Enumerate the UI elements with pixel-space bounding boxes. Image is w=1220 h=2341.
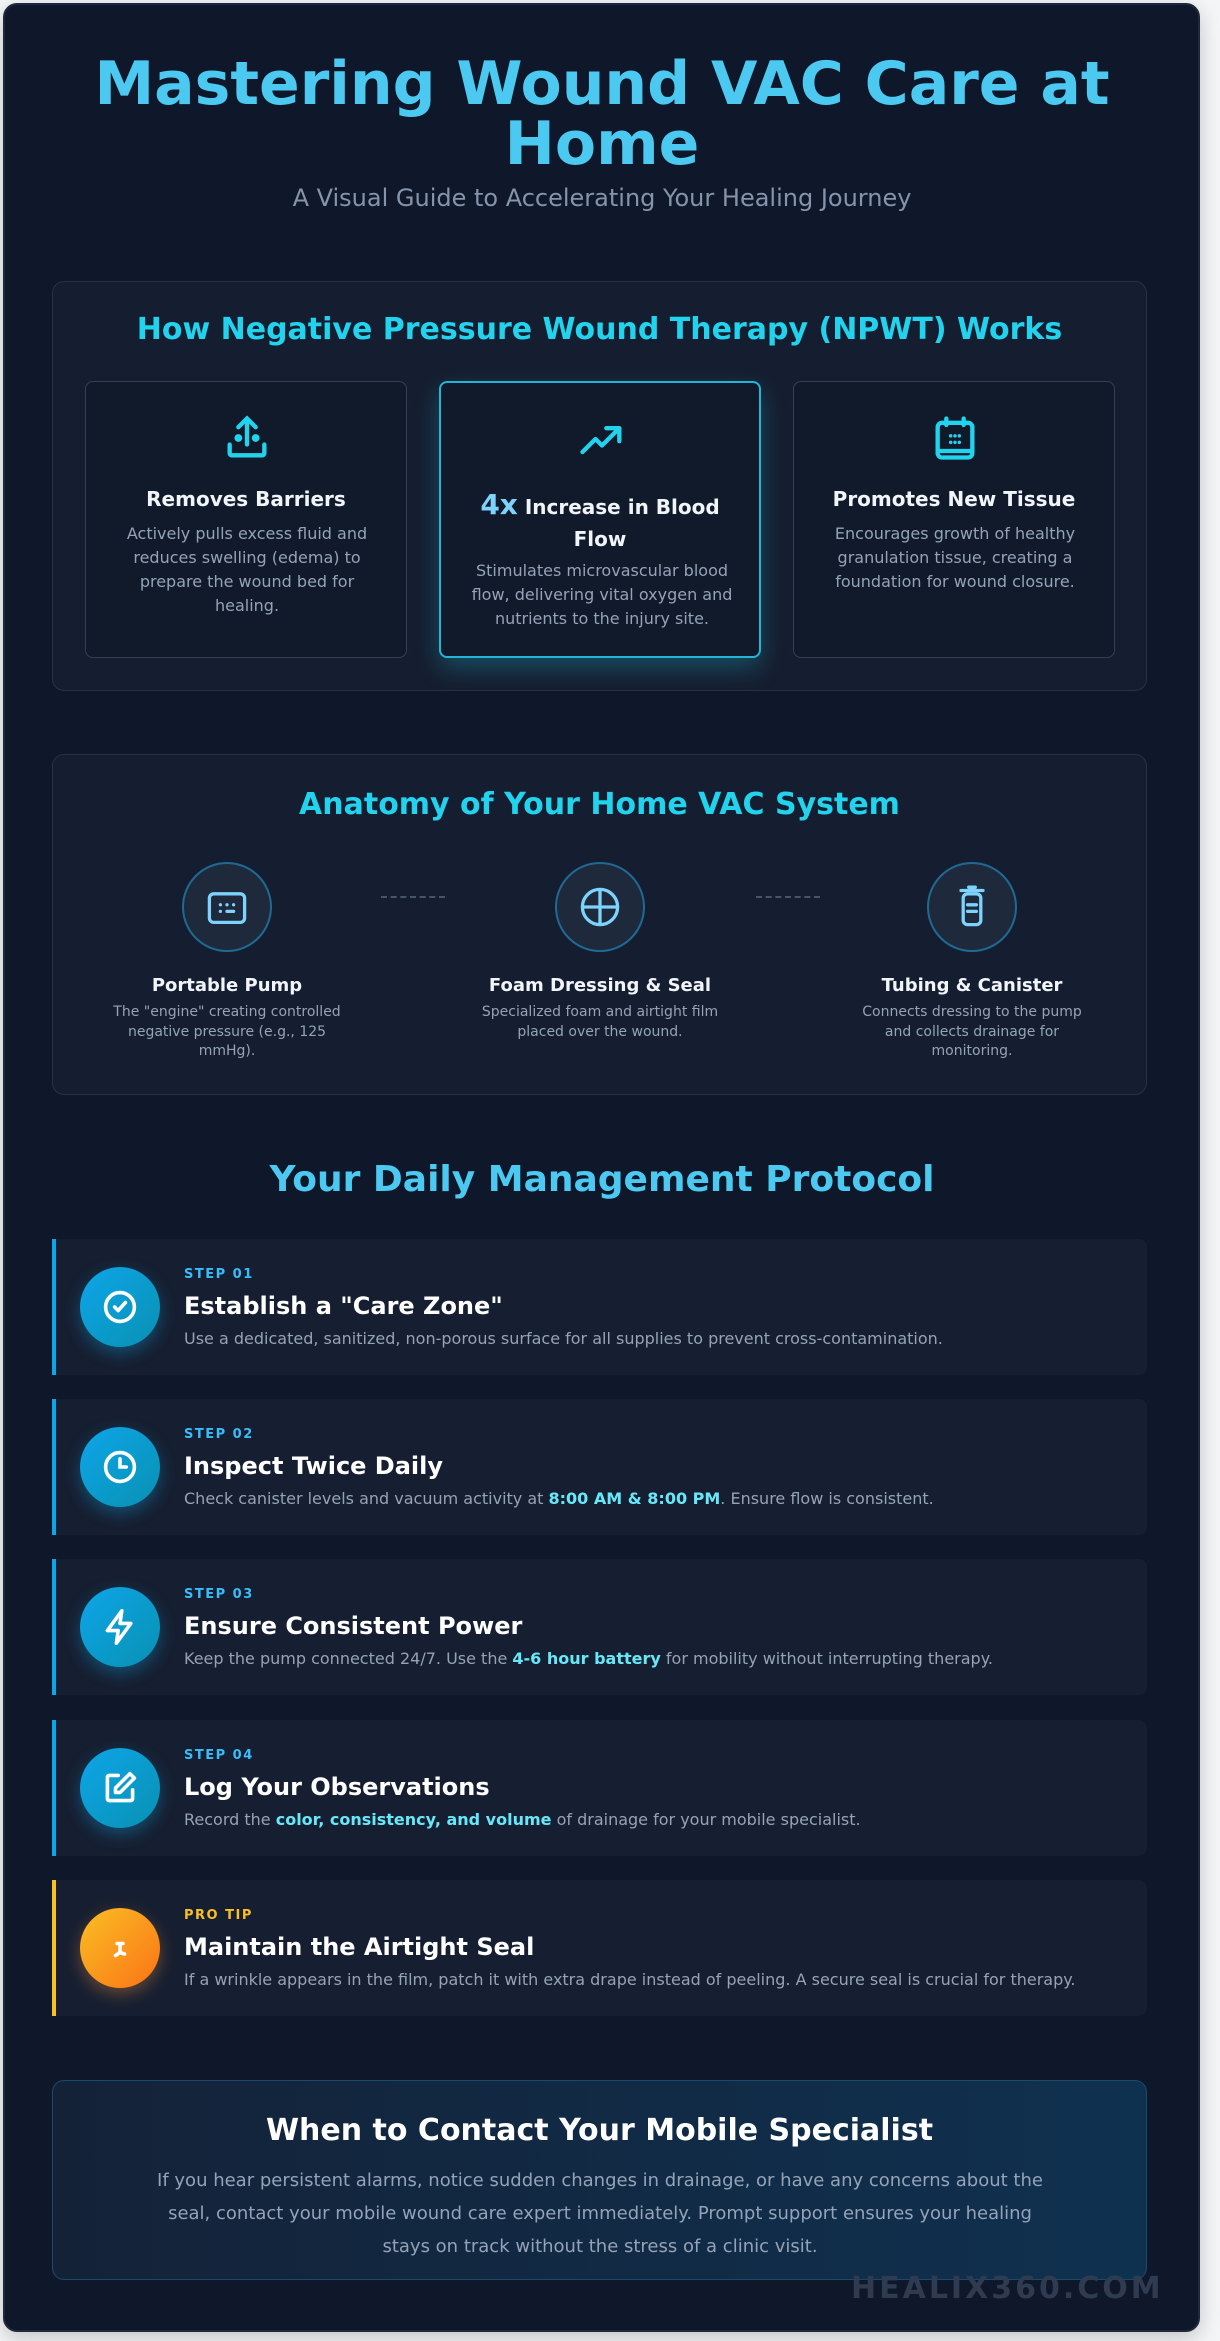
label: tubing xyxy=(862,975,1082,1059)
step 3: STEP 03 xyxy=(184,1587,254,1602)
callout: contact specialist: If you hear persistent alarms, notice sudden changes in drainage, or have any concerns about the seal, contact your mobile wound care expert immediately. Prompt support ensures your healing stays on track without the stress of a clinic visit. xyxy=(157,2170,1043,2257)
icon: bolt xyxy=(80,1587,160,1667)
pro tip: Maintain the Airtight Seal xyxy=(184,1933,534,1961)
title: Home xyxy=(505,109,699,179)
card: removes barriers: Removes Barriers xyxy=(146,487,346,511)
icon: foam dressing xyxy=(555,862,645,952)
pro tip: PRO TIP xyxy=(184,1908,253,1923)
step 4: Log Your Observations xyxy=(184,1773,490,1801)
step 1 xyxy=(52,1239,1147,1375)
panel: NPWT works xyxy=(52,281,1147,691)
label: tubing: Connects dressing to the pump and collects drainage for monitoring. xyxy=(862,1004,1082,1059)
pro tip: If a wrinkle appears in the film, patch it with extra drape instead of peeling. A secure seal is crucial for therapy. xyxy=(184,1970,1076,1989)
step 1: STEP 01 xyxy=(184,1267,254,1282)
subtitle: A Visual Guide to Accelerating Your Healing Journey xyxy=(293,184,911,212)
icon: clock xyxy=(80,1427,160,1507)
watermark: HEALIX360.COM xyxy=(851,2271,1164,2306)
card: blood flow: Stimulates microvascular blood flow, delivering vital oxygen and nutrients to the injury site. xyxy=(472,561,732,628)
callout: contact specialist xyxy=(52,2080,1147,2280)
pro tip xyxy=(52,1880,1147,2016)
step 2: Check canister levels and vacuum activity at 8:00 AM & 8:00 PM. Ensure flow is consistent. xyxy=(184,1489,934,1508)
card: removes barriers: Actively pulls excess fluid and reduces swelling (edema) to prepare the wound bed for healing. xyxy=(127,524,367,615)
icon: edit xyxy=(80,1748,160,1828)
card: new tissue: Promotes New Tissue xyxy=(833,487,1075,511)
step 1: Establish a "Care Zone" xyxy=(184,1292,503,1320)
callout: contact specialist: When to Contact Your Mobile Specialist xyxy=(266,2113,933,2148)
heading: anatomy: Anatomy of Your Home VAC System xyxy=(299,787,900,822)
label: foam: Foam Dressing & Seal xyxy=(489,975,711,996)
card: blood flow xyxy=(439,381,761,658)
icon: tip xyxy=(80,1908,160,1988)
icon: calendar grid xyxy=(936,416,974,460)
icon: check xyxy=(80,1267,160,1347)
card: new tissue: Encourages growth of healthy granulation tissue, creating a foundation for wound closure. xyxy=(835,524,1075,591)
icon: upload drain xyxy=(228,416,266,458)
heading: NPWT: How Negative Pressure Wound Therapy (NPWT) Works xyxy=(137,312,1062,347)
step 3 xyxy=(52,1559,1147,1695)
step 2 xyxy=(52,1399,1147,1535)
panel: anatomy xyxy=(52,754,1147,1095)
icon: canister xyxy=(927,862,1017,952)
label: foam xyxy=(482,975,718,1040)
card: removes barriers xyxy=(85,381,407,658)
title: Mastering Wound VAC Care at xyxy=(94,49,1110,119)
card: new tissue xyxy=(793,381,1115,658)
label: tubing: Tubing & Canister xyxy=(882,975,1062,996)
label: pump: Portable Pump xyxy=(152,975,302,996)
label: pump: The "engine" creating controlled negative pressure (e.g., 125 mmHg). xyxy=(113,1004,341,1059)
step 4: Record the color, consistency, and volume of drainage for your mobile specialist. xyxy=(184,1810,861,1829)
step 4: STEP 04 xyxy=(184,1748,254,1763)
step 3: Ensure Consistent Power xyxy=(184,1612,522,1640)
icon: pump xyxy=(182,862,272,952)
title xyxy=(94,49,1110,179)
label: pump xyxy=(113,975,341,1059)
heading: protocol: Your Daily Management Protocol xyxy=(269,1159,934,1200)
label: foam: Specialized foam and airtight film placed over the wound. xyxy=(482,1004,718,1040)
card: blood flow: Flow xyxy=(574,527,626,551)
step 1: Use a dedicated, sanitized, non-porous surface for all supplies to prevent cross-contamination. xyxy=(184,1329,943,1348)
step 3: Keep the pump connected 24/7. Use the 4-6 hour battery for mobility without interrupting therapy. xyxy=(184,1649,993,1668)
card: blood flow: 4x Increase in Blood xyxy=(480,488,720,521)
icon: trend arrow xyxy=(580,426,622,454)
step 4 xyxy=(52,1720,1147,1856)
step 2: Inspect Twice Daily xyxy=(184,1452,443,1480)
step 2: STEP 02 xyxy=(184,1427,254,1442)
